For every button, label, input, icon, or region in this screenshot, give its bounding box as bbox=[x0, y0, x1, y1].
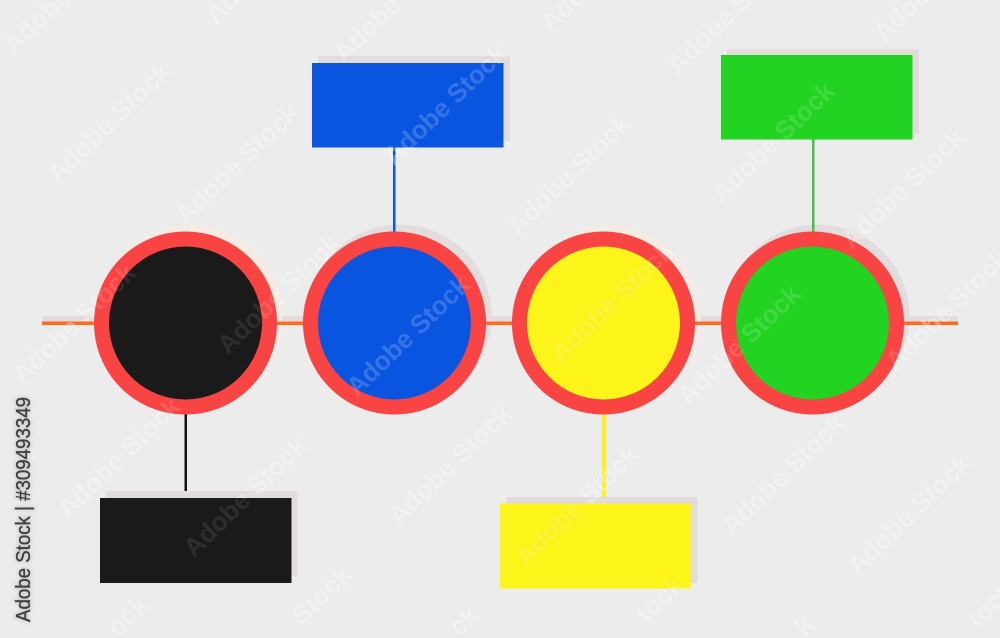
connector: black bbox=[184, 414, 187, 491]
watermark tint: yellow node bbox=[527, 246, 680, 400]
watermark pattern: Adobe Stock bbox=[544, 235, 680, 368]
watermark tint: callout boxes bbox=[100, 55, 912, 588]
watermark pattern: tock bbox=[630, 569, 690, 628]
watermark pattern: Stock bbox=[285, 559, 358, 631]
watermark pattern: Adobe Stock bbox=[211, 227, 347, 360]
node 3: yellow bbox=[512, 232, 695, 414]
watermark tint: black node bbox=[109, 246, 262, 400]
watermark pattern: Adobe Stock bbox=[509, 439, 645, 572]
connector: blue bbox=[393, 147, 396, 233]
watermark pattern: Adobe Stock bbox=[382, 398, 518, 531]
watermark pattern: Adobe Stock bbox=[501, 108, 637, 241]
watermark pattern: Adobe Stock bbox=[705, 75, 841, 208]
node shadows bbox=[100, 224, 910, 408]
timeline shadow bbox=[42, 316, 958, 322]
connector: green bbox=[812, 139, 814, 233]
watermark pattern: Adobe Stock bbox=[715, 408, 851, 541]
watermark pattern: Adobe Stock bbox=[671, 278, 807, 411]
watermark pattern bbox=[65, 56, 951, 588]
watermark pattern: Adobe Stock bbox=[51, 391, 187, 524]
timeline axis bbox=[42, 322, 958, 325]
watermark pattern: Adobe Stock bbox=[835, 122, 971, 255]
watermark pattern: Adobe Stock bbox=[841, 448, 977, 581]
watermark tint: blue node bbox=[318, 246, 471, 400]
watermark tint: green node bbox=[736, 246, 889, 400]
watermark pattern: Adobe Stock bbox=[6, 257, 142, 390]
stock id label shadow: Adobe Stock | #309493349 bbox=[13, 397, 35, 622]
node 2: blue bbox=[303, 232, 486, 414]
watermark pattern: Adobe Stock bbox=[340, 269, 476, 402]
node 1: black bbox=[94, 232, 277, 414]
watermark pattern: Adobe Stock bbox=[41, 56, 177, 189]
callout box: black bbox=[100, 491, 298, 583]
watermark pattern: Adobe Stock bbox=[177, 430, 313, 563]
callout box: green bbox=[721, 49, 919, 140]
callout box: blue bbox=[312, 56, 510, 148]
callout box: yellow bbox=[500, 497, 698, 588]
watermark pattern: Adobe Stock bbox=[169, 97, 305, 230]
watermark pattern: Adobe Stock bbox=[377, 38, 513, 171]
node 4: green bbox=[721, 232, 904, 414]
stock id label: Adobe Stock | #309493349 bbox=[13, 397, 35, 622]
watermark tint: node rings bbox=[102, 239, 896, 407]
connector: yellow bbox=[602, 414, 606, 497]
